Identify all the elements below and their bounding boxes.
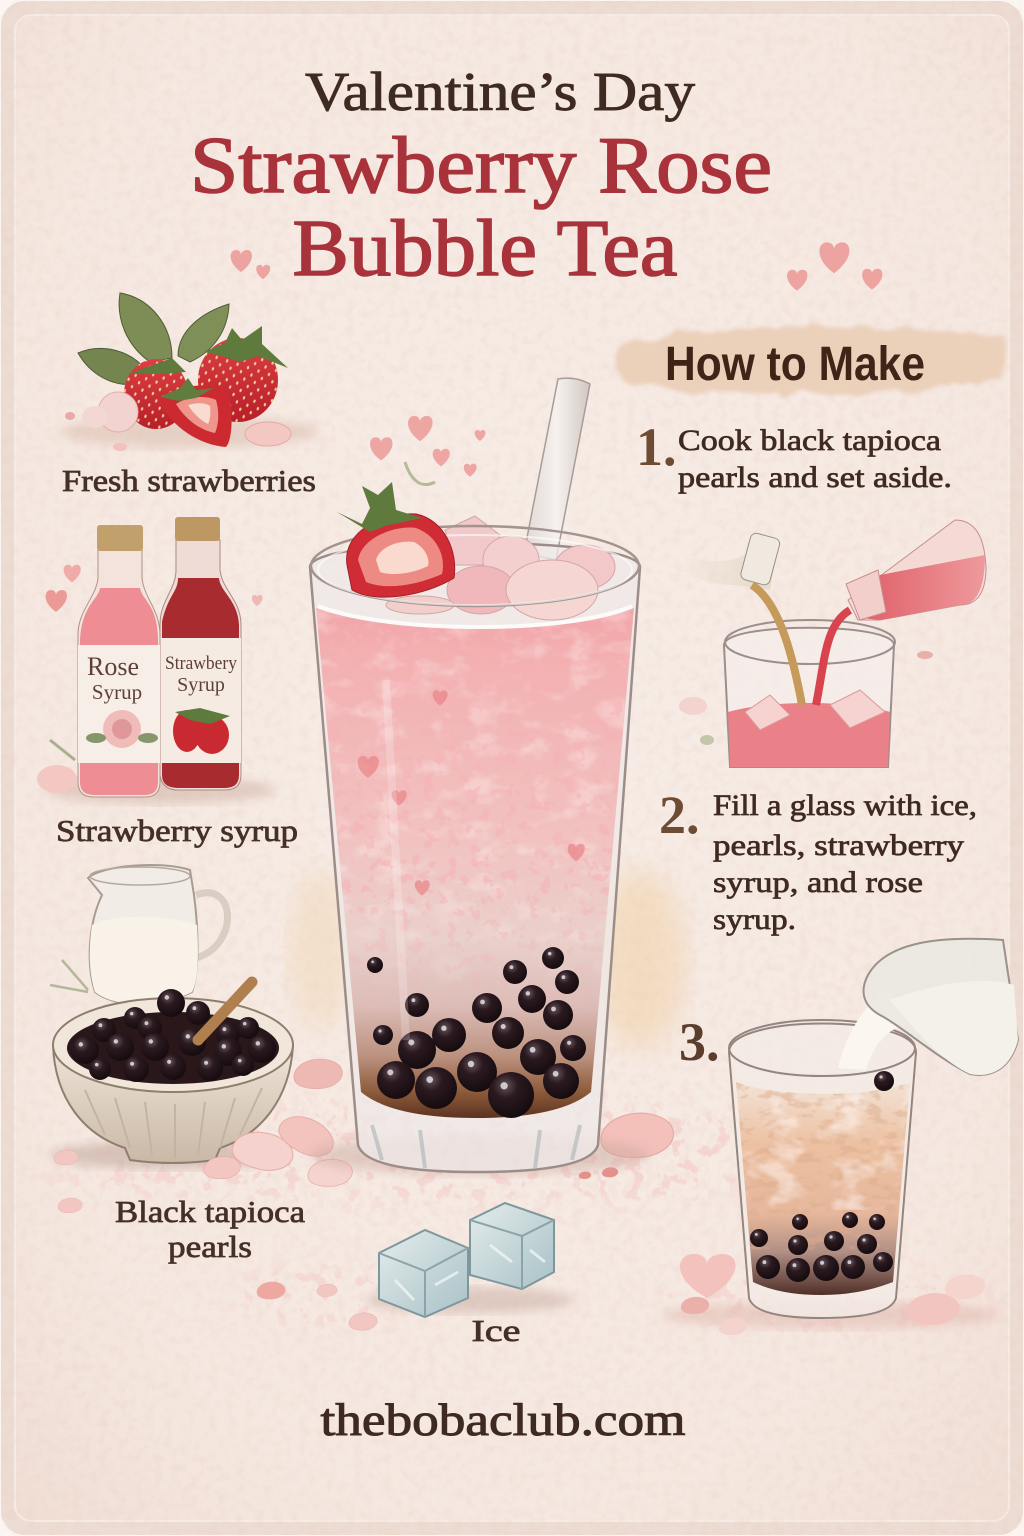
strawberry garnish [337,482,455,597]
decorative hearts near title [231,242,882,291]
ice on top [386,516,615,620]
small glass [729,1024,916,1318]
brush banner [614,327,1006,395]
main bubble tea glass [290,378,686,1175]
label: black tapioca pearls [115,1194,305,1264]
title [190,61,772,293]
step number 1: 1. [636,417,676,477]
label: strawberry syrup: Strawberry syrup [56,813,298,848]
label: fresh strawberries: Fresh strawberries [62,463,316,498]
step 3 illustration: pouring milk [660,939,1018,1335]
step 1 [636,417,952,494]
title line: Bubble Tea: Bubble Tea [292,205,678,293]
small serving glass [724,628,894,767]
scattered petals [54,1059,674,1330]
icon: rose syrup bottle: Syrup [92,680,142,704]
step 2 text: pearls, strawberry [713,829,964,862]
step 2 text: syrup. [713,903,796,936]
straw [524,378,590,560]
pearls in bowl [71,989,276,1082]
pearls small glass [750,1071,894,1282]
ingredient: bowl of black tapioca pearls [50,982,293,1169]
step 3 number: 3. [679,1012,720,1072]
ingredient: syrup bottles [37,517,275,804]
pink bottle [848,520,986,620]
pour streams [752,585,802,705]
how to make heading [614,327,1006,395]
ingredient: fresh strawberries [60,293,320,451]
title line: Valentine's Day: Valentine’s Day [305,61,696,122]
label: black tapioca pearls: pearls [168,1229,252,1264]
icon: ice cubes [365,1203,575,1317]
watercolor splatter [40,1095,1000,1330]
icon: rose syrup bottle: Rose [87,652,139,681]
tapioca pearls [367,947,586,1118]
step 1 text: Cook black tapioca [678,424,941,457]
rim [311,526,639,606]
icon: strawberry syrup bottle [160,517,241,790]
pink mottled flecks [316,608,632,952]
petals near step 3 [680,1254,985,1335]
step 2 text: syrup, and rose [713,866,923,899]
label: ice: Ice [472,1313,520,1348]
footer website: thebobaclub.com [320,1394,686,1445]
glass highlights [386,680,406,1040]
small hearts above glass [370,416,485,485]
step 2 text [713,789,977,936]
step 1 text [678,424,952,494]
step 2 text: Fill a glass with ice, [713,789,977,822]
step 1 illustration: pouring syrups [679,520,986,767]
label: black tapioca pearls: Black tapioca [115,1194,305,1229]
icon: strawberry syrup bottle: Syrup [177,674,225,696]
title line: Strawberry Rose: Strawberry Rose [190,122,772,210]
milk jug [864,939,1018,1075]
icon: rose syrup bottle [78,525,160,797]
milk pour [838,990,915,1070]
small heart flecks in drink [358,690,585,896]
icon: strawberry syrup bottle: Strawbery [165,653,237,674]
step 2 [659,785,977,936]
ingredient: milk pitcher [50,865,228,1004]
glass base facets [372,1125,580,1168]
step number 2: 2. [659,785,700,845]
drink liquid [316,608,634,1118]
glass body [310,543,640,1172]
how to make heading: How to Make [665,338,925,391]
step 1 text: pearls and set aside. [678,461,952,494]
